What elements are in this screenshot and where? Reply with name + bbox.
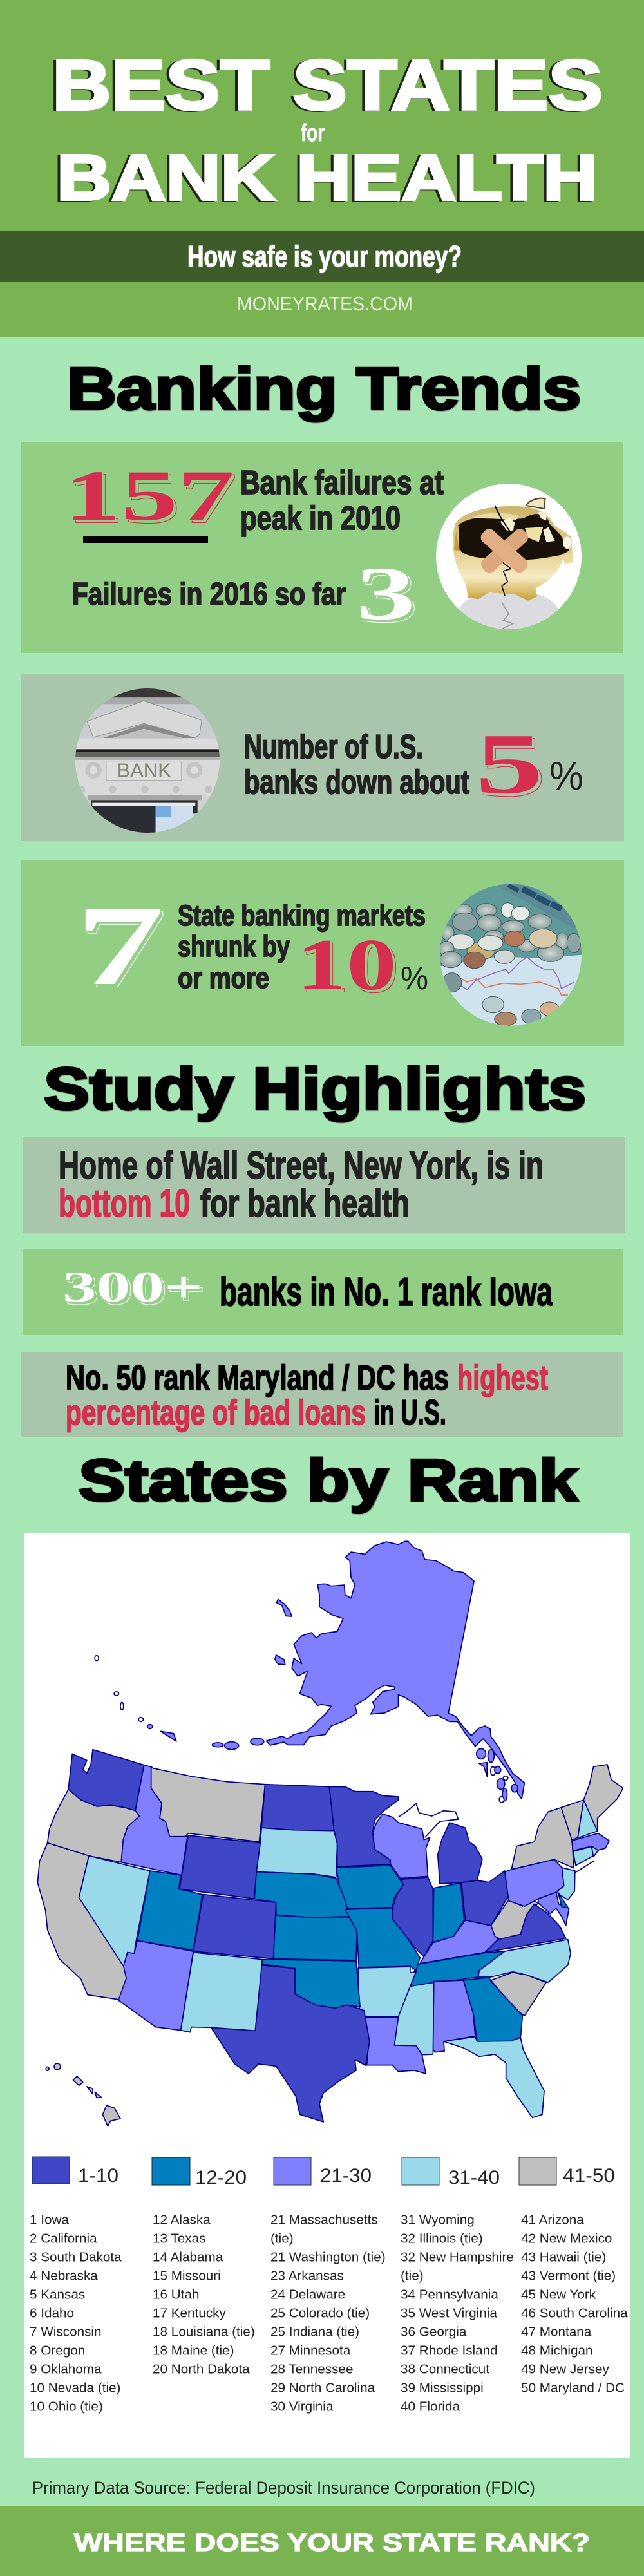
text: shrunk by: shrunk by (178, 930, 290, 963)
legend: 1-10 (32, 2157, 118, 2186)
rank list: column 2: 14 Alabama (153, 2250, 223, 2264)
percent sign: % (549, 754, 583, 799)
percent sign: % (401, 960, 428, 996)
state: new york (511, 1808, 574, 1870)
rank list: column 4: 32 Illinois (tie) (401, 2231, 483, 2246)
state: wyoming (180, 1835, 260, 1899)
state: north carolina (478, 1940, 571, 1982)
rank list: column 3: 27 Minnesota (270, 2343, 351, 2358)
state: washington (68, 1750, 144, 1811)
state: new hampshire (578, 1800, 598, 1838)
legend: 1-10: 1-10 (78, 2165, 118, 2186)
rank list: column 1: 1 Iowa (30, 2213, 69, 2227)
state: new mexico (181, 1953, 262, 2032)
panel: maryland highlight (21, 1352, 623, 1437)
text: bottom 10: bottom 10 (59, 1182, 190, 1225)
rank list: column 5: 48 Michigan (521, 2343, 593, 2358)
state: alaska (95, 1541, 524, 1803)
state: idaho (121, 1765, 187, 1875)
state: michigan (438, 1823, 482, 1884)
rank list: column 1: 6 Idaho (30, 2306, 74, 2321)
legend (32, 2157, 615, 2188)
panel: number of banks (21, 674, 624, 841)
rank list: column 2: 17 Kentucky (153, 2306, 227, 2321)
rank list: column 5: 46 South Carolina (521, 2306, 628, 2321)
panel: iowa highlight (23, 1249, 623, 1335)
stat: 5: 5 (475, 716, 544, 811)
rank list: column 1: 9 Oklahoma (30, 2362, 102, 2376)
state: tennessee (410, 1951, 505, 1986)
panel: new york highlight (23, 1137, 625, 1233)
heading: states by rank: States by Rank (79, 1448, 578, 1513)
rank list: column 4: 31 Wyoming (401, 2213, 475, 2227)
rank list: column 4: 36 Georgia (401, 2325, 467, 2339)
panel: shrinking markets (21, 860, 624, 1046)
rank list: column 3: 24 Delaware (270, 2287, 345, 2302)
text: for bank health: for bank health (200, 1182, 410, 1225)
underline bar (83, 536, 208, 543)
footer text: WHERE DOES YOUR STATE RANK? (74, 2530, 590, 2557)
state: maryland (538, 1892, 569, 1926)
state: arkansas (358, 1967, 416, 2017)
icon: bank building (75, 688, 220, 833)
rank list: column 5: 47 Montana (521, 2325, 592, 2339)
state: vermont (561, 1800, 583, 1840)
state: utah (137, 1871, 202, 1950)
rank list: column 3: 29 North Carolina (270, 2380, 375, 2396)
state: texas (211, 1965, 370, 2122)
rank list: column 1: 10 Nevada (tie) (30, 2380, 120, 2396)
rank list: column 3: 21 Massachusetts (270, 2213, 378, 2227)
rank list: column 5: 45 New York (521, 2287, 596, 2302)
rank list: column 2: 20 North Dakota (153, 2362, 250, 2376)
rank list: column 2: 18 Louisiana (tie) (153, 2325, 255, 2339)
legend: 12-20: 12-20 (195, 2167, 247, 2188)
text: or more: or more (178, 961, 269, 994)
rank list: column 4: 32 New Hampshire (401, 2250, 514, 2264)
long island (574, 1861, 594, 1873)
title line: bank health: BANK HEALTH (57, 142, 598, 214)
legend: 12-20 (152, 2157, 247, 2188)
rank list: column 3: 25 Indiana (tie) (270, 2325, 359, 2339)
state: florida (444, 2037, 544, 2117)
state: pennsylvania (505, 1859, 564, 1906)
rank list: column 3: 28 Tennessee (270, 2362, 353, 2376)
stat: 7: 7 (75, 882, 164, 1009)
state: south carolina (491, 1973, 546, 2016)
title line: best states: BEST STATES (52, 46, 603, 125)
rank list: column 5: 43 Hawaii (tie) (521, 2250, 606, 2264)
rank list: column 2: 16 Utah (153, 2287, 199, 2302)
rank list: column 1: 10 Ohio (tie) (30, 2400, 103, 2414)
legend: 31-40 (402, 2157, 500, 2188)
text: peak in 2010: peak in 2010 (240, 500, 401, 537)
text: failures in 2016: Failures in 2016 so far (72, 577, 346, 612)
rank list: column 4: (tie) (401, 2268, 424, 2284)
text: banks down about: banks down about (244, 764, 469, 801)
icon text: bank: BANK (117, 760, 171, 782)
state: delaware (558, 1892, 568, 1908)
legend: 21-30 (274, 2157, 372, 2186)
state: mississippi (394, 1982, 434, 2055)
stat: 300+: 300+ (62, 1262, 203, 1311)
state: louisiana (364, 2017, 426, 2074)
rank list: column 3: 25 Colorado (tie) (270, 2306, 370, 2321)
rank list: column 2: 12 Alaska (153, 2213, 211, 2227)
rank list: column 1: 3 South Dakota (30, 2250, 122, 2264)
rank list: column 2: 18 Maine (tie) (153, 2343, 234, 2358)
data source note: Primary Data Source: Federal Deposit Insurance Corporation (FDIC) (32, 2478, 535, 2497)
rank list: column 2: 13 Texas (153, 2231, 205, 2246)
state: maine (583, 1765, 623, 1831)
state: illinois (392, 1877, 433, 1956)
state: new jersey (556, 1868, 575, 1900)
rank list: column 5: 42 New Mexico (521, 2231, 612, 2246)
state: hawaii (46, 2063, 120, 2126)
rank list: column 1: 8 Oregon (30, 2343, 85, 2358)
text: state banking markets: State banking markets (178, 899, 426, 932)
rank list: column 2: 15 Missouri (153, 2268, 221, 2284)
state: colorado (193, 1895, 276, 1959)
icon: coins and chart (440, 884, 582, 1025)
rank list: column 4: 40 Florida (401, 2400, 460, 2414)
title word: for: for (301, 120, 325, 147)
rank list: column 3: 23 Arkansas (270, 2268, 344, 2284)
panel: map and rankings (24, 1533, 630, 2458)
legend: 41-50 (519, 2157, 615, 2186)
rank list: column 1: 7 Wisconsin (30, 2325, 102, 2339)
rank list: column 4: 38 Connecticut (401, 2362, 489, 2376)
rank list: column 4: 37 Rhode Island (401, 2343, 498, 2358)
rank list: column 1: 2 California (30, 2231, 97, 2246)
state: connecticut (573, 1846, 594, 1866)
map of united states (37, 1541, 623, 2126)
state: rhode island (592, 1846, 598, 1857)
subtitle text: How safe is your money? (187, 240, 462, 273)
text: no 50 rank maryland: No. 50 rank Maryland / DC has (66, 1358, 449, 1397)
state: virginia (485, 1904, 566, 1953)
rank list: column 4: 39 Mississippi (401, 2380, 484, 2396)
rank list: column 1: 4 Nebraska (30, 2268, 98, 2284)
header banner (0, 0, 644, 337)
rank list: column 4: 35 West Virginia (401, 2306, 497, 2321)
state: oklahoma (262, 1960, 360, 2008)
legend: 21-30: 21-30 (320, 2165, 372, 2186)
rank list: column 5: 43 Vermont (tie) (521, 2268, 616, 2284)
rank list: column 5: 49 New Jersey (521, 2362, 609, 2376)
text: percentage of bad loans: percentage of bad loans (66, 1392, 366, 1432)
subtitle band (0, 231, 644, 282)
text: in us: in U.S. (374, 1392, 446, 1432)
legend: 31-40: 31-40 (448, 2167, 500, 2188)
state: north dakota (261, 1785, 334, 1831)
state: missouri (345, 1908, 420, 1971)
state: indiana (433, 1883, 464, 1942)
state: nebraska (254, 1872, 349, 1917)
state: california (37, 1843, 126, 2000)
heading: study highlights: Study Highlights (44, 1056, 586, 1122)
state: kentucky (420, 1920, 498, 1964)
state: ohio (461, 1871, 509, 1926)
panel: bank failures (21, 442, 623, 653)
rank list: column 3: 21 Washington (tie) (270, 2250, 386, 2264)
state: west virginia (491, 1899, 538, 1940)
state: wisconsin (373, 1814, 430, 1879)
source brand: MONEYRATES.COM (237, 292, 413, 315)
state: iowa (336, 1866, 403, 1909)
footer banner (0, 2506, 644, 2576)
state: georgia (464, 1978, 522, 2041)
text: bank failures at peak: Bank failures at (240, 464, 444, 502)
text: highest: highest (457, 1358, 548, 1397)
state: kansas (273, 1915, 357, 1960)
stat: 10: 10 (296, 923, 397, 1005)
rank list: column 5: 41 Arizona (521, 2213, 584, 2227)
state: south dakota (256, 1828, 337, 1877)
rank list: column 4: 34 Pennsylvania (401, 2287, 498, 2302)
state: massachusetts (572, 1833, 609, 1851)
state: minnesota (329, 1786, 399, 1866)
legend: 41-50: 41-50 (563, 2165, 615, 2186)
state: nevada (79, 1856, 150, 1966)
stat: 3: 3 (356, 551, 415, 636)
text: number of us banks: Number of U.S. (244, 728, 423, 766)
state: alabama (433, 1980, 475, 2052)
rank list: column 3: 30 Virginia (270, 2400, 334, 2414)
state: oregon (48, 1789, 139, 1862)
stat: 157: 157 (64, 456, 234, 536)
heading: banking trends: Banking Trends (67, 356, 581, 422)
state: arizona (118, 1940, 193, 2031)
state: montana (151, 1768, 265, 1842)
michigan upper outline (399, 1804, 459, 1837)
icon: cracked piggy bank (436, 484, 582, 636)
rank list: column 3: (tie) (270, 2231, 294, 2246)
rank list: column 1: 5 Kansas (30, 2287, 85, 2302)
rank list: column 5: 50 Maryland / DC (521, 2380, 625, 2396)
